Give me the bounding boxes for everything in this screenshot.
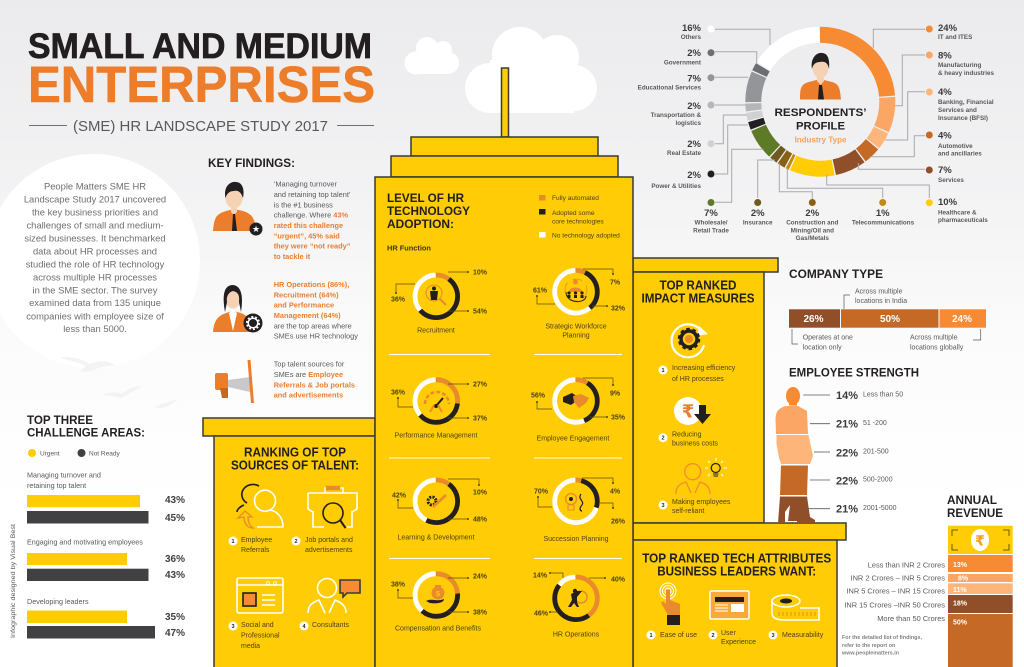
text: finding 2: are the top areas where bbox=[274, 321, 352, 330]
donut: performance management: 37% bbox=[473, 416, 488, 422]
right legend: Services bbox=[938, 177, 964, 184]
icon: social media window bbox=[237, 578, 283, 613]
clouds bbox=[404, 27, 597, 113]
panel: respondents' profile: PROFILE bbox=[796, 120, 845, 132]
stacked bar: 26% bbox=[803, 314, 824, 325]
icon: efficiency gear bbox=[672, 324, 708, 357]
panel: company type: Across multiple bbox=[855, 288, 903, 296]
revenue labels: More than 50 Crores bbox=[877, 614, 945, 623]
donut: HR operations: 40% bbox=[611, 576, 626, 584]
donut chart bbox=[753, 35, 887, 169]
intro circle: challenges of small and medium- bbox=[26, 220, 164, 231]
values bbox=[836, 390, 903, 516]
revenue labels: Less than INR 2 Crores bbox=[868, 560, 945, 569]
panel: top three challenge areas bbox=[27, 413, 185, 639]
legend: Fully automated bbox=[552, 195, 599, 202]
labels with rank numbers bbox=[658, 365, 736, 515]
revenue stack: 8% bbox=[958, 576, 969, 582]
heading: ADOPTION: bbox=[387, 217, 454, 231]
text: finding 2: and Performance bbox=[274, 301, 334, 310]
left legend: Transportation & bbox=[651, 112, 701, 119]
center person bbox=[800, 53, 841, 100]
panel: annual revenue bbox=[841, 493, 1013, 667]
donut: strategic workforce planning: 7% bbox=[610, 280, 621, 286]
left legend: 2% bbox=[687, 48, 702, 59]
panel: level of HR technology adoption: HR Function bbox=[387, 244, 431, 253]
icon: measuring tape bbox=[772, 595, 819, 620]
left legend: logistics bbox=[675, 120, 701, 127]
panel: annual revenue: ANNUAL bbox=[947, 493, 997, 507]
donut: learning and development: 10% bbox=[473, 490, 488, 496]
stacked bar bbox=[789, 309, 986, 328]
panel: level of HR technology adoption bbox=[387, 191, 626, 638]
labels with rank numbers: Ease of use bbox=[660, 632, 697, 639]
labels with rank numbers: 3 bbox=[231, 624, 235, 630]
bar chart: 43% bbox=[165, 495, 185, 506]
key findings: KEY FINDINGS: bbox=[208, 156, 295, 170]
left legend: 16% bbox=[682, 23, 702, 34]
intro circle: less than 5000. bbox=[63, 323, 127, 334]
labels with rank numbers: Increasing efficiency bbox=[672, 365, 736, 372]
labels with rank numbers: business costs bbox=[672, 441, 718, 448]
title: ENTERPRISES bbox=[28, 56, 375, 113]
icon: male professional with star badge bbox=[213, 182, 262, 236]
bottom legend: 2% bbox=[751, 208, 765, 219]
donut: learning and development: 42% bbox=[392, 492, 407, 500]
panel: ranking of top sources of talent bbox=[228, 446, 360, 650]
panel: employee strength bbox=[776, 366, 919, 523]
bar chart: 43% bbox=[165, 570, 185, 581]
labels with rank numbers: Making employees bbox=[672, 499, 731, 506]
text: finding 1: to tackle it bbox=[274, 252, 311, 261]
bottom legend: 1% bbox=[876, 208, 890, 219]
legend: core technologies bbox=[552, 218, 604, 226]
right legend: and ancillaries bbox=[938, 150, 982, 158]
labels with rank numbers: Reducing bbox=[672, 432, 702, 439]
birds bbox=[60, 357, 180, 408]
icon: consultant bbox=[308, 578, 360, 613]
labels with rank numbers: User bbox=[721, 630, 736, 637]
stacked bar: 50% bbox=[880, 314, 900, 325]
right legend: Banking, Financial bbox=[938, 99, 994, 106]
legend: Urgent bbox=[40, 450, 60, 458]
left legend: Others bbox=[681, 34, 701, 41]
labels with rank numbers: Job portals and bbox=[305, 537, 353, 544]
donut: strategic workforce planning: 61% bbox=[533, 288, 548, 294]
bar chart: 47% bbox=[165, 628, 185, 639]
title bbox=[28, 27, 375, 135]
icon: rupee cost reduction: ₹ bbox=[682, 402, 694, 422]
values: 21% bbox=[836, 419, 858, 431]
right legend bbox=[926, 23, 994, 224]
right legend: Automotive bbox=[938, 143, 973, 150]
donut: employee engagement bbox=[531, 378, 626, 442]
revenue stack bbox=[948, 526, 1013, 667]
donut: succession planning: 26% bbox=[611, 518, 626, 526]
legend bbox=[539, 195, 620, 240]
labels with rank numbers: of HR processes bbox=[672, 376, 724, 383]
revenue stack: 18% bbox=[953, 600, 968, 608]
text: finding 1: rated this challenge bbox=[274, 221, 343, 230]
revenue stack: 50% bbox=[953, 620, 968, 626]
labels with rank numbers: 1 bbox=[231, 539, 235, 545]
text: finding 2: Management (64%) bbox=[274, 311, 341, 320]
labels with rank numbers: advertisements bbox=[305, 547, 353, 554]
values: 2001-5000 bbox=[863, 505, 897, 512]
panel: respondents' profile: Industry Type bbox=[795, 136, 847, 144]
donut: learning and development: Learning & Development bbox=[397, 534, 475, 542]
donut: succession planning: 70% bbox=[534, 488, 549, 496]
note: For the detailed list of findings, bbox=[842, 635, 922, 641]
panel: ranking of top sources of talent: RANKING OF TOP bbox=[244, 446, 346, 460]
left legend bbox=[638, 23, 714, 190]
donut: employee engagement: Employee Engagement bbox=[537, 436, 609, 442]
title: SMALL AND MEDIUM bbox=[28, 27, 372, 66]
icon: job portals bbox=[308, 486, 357, 528]
human figure chart bbox=[776, 387, 815, 523]
text: finding 3: Top talent sources for bbox=[274, 360, 345, 369]
bottom legend: 7% bbox=[704, 208, 718, 219]
labels with rank numbers: 4 bbox=[302, 624, 306, 630]
labels with rank numbers: Social and bbox=[241, 622, 274, 629]
donut: HR operations bbox=[533, 572, 626, 638]
intro circle: sized businesses. It benchmarked bbox=[24, 232, 166, 243]
labels with rank numbers: Consultants bbox=[312, 622, 349, 629]
donut: performance management: Performance Management bbox=[395, 432, 477, 440]
heading: LEVEL OF HR bbox=[387, 191, 464, 205]
donut: recruitment: 10% bbox=[473, 270, 488, 276]
bottom legend: Construction and bbox=[786, 220, 839, 226]
legend bbox=[28, 449, 120, 458]
icon: male professional with star badge: ★ bbox=[252, 225, 260, 235]
revenue stack: 11% bbox=[953, 587, 967, 594]
bar chart: 45% bbox=[165, 513, 185, 524]
revenue labels: INR 2 Crores – INR 5 Crores bbox=[851, 574, 945, 583]
right legend: 24% bbox=[938, 23, 958, 34]
bar chart: 36% bbox=[165, 554, 185, 565]
values: 14% bbox=[836, 390, 858, 402]
labels with rank numbers: Measurability bbox=[782, 632, 824, 639]
text: finding 1: “urgent”, 45% said bbox=[274, 231, 340, 240]
donut: succession planning bbox=[534, 478, 626, 543]
intro circle: across multiple HR processes bbox=[33, 271, 157, 282]
center text: RESPONDENTS’ bbox=[774, 107, 866, 119]
text: finding 3: Referrals & Job portals bbox=[274, 380, 355, 389]
values: 22% bbox=[836, 448, 858, 460]
panel: top ranked impact measures bbox=[642, 278, 754, 515]
leader lines bbox=[715, 29, 929, 202]
intro circle: Landscape Study 2017 uncovered bbox=[24, 193, 166, 204]
donut: strategic workforce planning bbox=[533, 269, 626, 340]
donut: performance management: 36% bbox=[391, 390, 406, 396]
panel: top ranked impact measures: IMPACT MEASURES bbox=[642, 291, 754, 305]
panel: top three challenge areas: CHALLENGE AREAS: bbox=[27, 426, 145, 440]
right legend: & heavy industries bbox=[938, 70, 994, 77]
left legend: Power & Utilities bbox=[651, 183, 701, 190]
building shapes bbox=[203, 68, 846, 667]
panel: employee strength: EMPLOYEE STRENGTH bbox=[789, 366, 919, 380]
values: 201-500 bbox=[863, 448, 889, 456]
donut: HR operations: HR Operations bbox=[553, 632, 600, 638]
donut: learning and development bbox=[392, 479, 488, 542]
donut: employee engagement: 56% bbox=[531, 392, 546, 400]
bar chart: Engaging and motivating employees bbox=[27, 538, 143, 547]
icon: touch hand bbox=[660, 583, 680, 625]
title: (SME) HR LANDSCAPE STUDY 2017 bbox=[73, 119, 328, 135]
values: 22% bbox=[836, 476, 858, 488]
revenue labels bbox=[844, 560, 945, 623]
intro circle: data about HR processes and bbox=[33, 245, 157, 256]
panel: respondents' profile bbox=[638, 23, 994, 242]
labels with rank numbers: 3 bbox=[771, 633, 775, 639]
labels with rank numbers: media bbox=[241, 643, 260, 650]
legend: Not Ready bbox=[89, 450, 120, 458]
text: finding 2: HR Operations (86%), bbox=[274, 280, 349, 289]
bottom legend: Retail Trade bbox=[693, 228, 729, 234]
panel: top ranked impact measures: TOP RANKED bbox=[660, 278, 736, 292]
panel: ranking of top sources of talent: SOURCES OF TALENT: bbox=[231, 458, 359, 472]
panel: company type: Across multiple bbox=[910, 334, 958, 342]
text: finding 3 bbox=[274, 360, 355, 400]
left legend: Educational Services bbox=[638, 84, 701, 92]
intro circle: People Matters SME HR bbox=[44, 180, 146, 191]
text: finding 1: challenge. Where 43% bbox=[274, 211, 348, 220]
labels with rank numbers: 2 bbox=[711, 633, 715, 639]
donut: performance management bbox=[391, 380, 488, 440]
panel: company type: locations in India bbox=[855, 298, 907, 305]
intro circle: studied the role of HR technology bbox=[26, 258, 165, 269]
labels with rank numbers: self-reliant bbox=[672, 508, 704, 515]
panel: top ranked tech attributes bbox=[642, 552, 831, 646]
right legend: Insurance (BFSI) bbox=[938, 115, 988, 122]
left legend: 2% bbox=[687, 139, 702, 150]
panel: company type bbox=[789, 267, 986, 352]
text: finding 1: and retaining top talent’ bbox=[274, 190, 351, 199]
labels with rank numbers: Employee bbox=[241, 537, 272, 544]
intro circle: examined data from 135 unique bbox=[29, 297, 161, 308]
labels with rank numbers: 2 bbox=[661, 436, 665, 442]
revenue labels: INR 5 Crores – INR 15 Crores bbox=[846, 586, 945, 595]
text: finding 2: Recruitment (64%) bbox=[274, 290, 339, 299]
donut: strategic workforce planning: Planning bbox=[562, 332, 590, 340]
intro circle: the key business priorities and bbox=[32, 207, 158, 218]
values: 21% bbox=[836, 504, 858, 516]
text: finding 1 bbox=[274, 180, 351, 261]
icon: self-reliant employee bbox=[676, 458, 727, 494]
icon: rupee cost reduction bbox=[674, 397, 711, 425]
labels with rank numbers: 3 bbox=[661, 503, 665, 509]
arrows bbox=[803, 395, 830, 509]
left legend: Government bbox=[664, 60, 702, 66]
donut: strategic workforce planning: 32% bbox=[611, 306, 626, 312]
icon: employee referrals bbox=[237, 484, 283, 528]
bottom legend: 2% bbox=[805, 208, 820, 219]
left legend: 7% bbox=[687, 74, 702, 84]
heading: TECHNOLOGY bbox=[387, 204, 470, 218]
key findings bbox=[208, 156, 358, 403]
donut: strategic workforce planning: Strategic Workforce bbox=[545, 324, 607, 330]
labels with rank numbers: 1 bbox=[661, 368, 665, 374]
bottom legend: Wholesale/ bbox=[695, 220, 728, 226]
right legend: pharmaceuticals bbox=[938, 217, 988, 224]
note: www.peoplematters.in bbox=[841, 651, 899, 657]
panel: top three challenge areas: TOP THREE bbox=[27, 413, 93, 427]
right legend: 7% bbox=[938, 165, 952, 176]
revenue stack: 13% bbox=[953, 562, 968, 569]
donut: HR operations: 14% bbox=[533, 572, 548, 580]
bar chart: 35% bbox=[165, 612, 185, 623]
values: Less than 50 bbox=[863, 392, 903, 398]
heading bbox=[387, 191, 470, 231]
donut: employee engagement: 9% bbox=[610, 390, 621, 398]
stacked bar: 24% bbox=[952, 314, 972, 325]
bottom legend: Insurance bbox=[743, 220, 773, 226]
donut: compensation and benefits bbox=[391, 574, 488, 632]
note bbox=[841, 635, 922, 657]
legend: Adopted some bbox=[552, 210, 595, 217]
panel: company type: Operates at one bbox=[803, 334, 853, 342]
donut: compensation and benefits: $ bbox=[436, 589, 441, 598]
values: 500-2000 bbox=[863, 476, 893, 484]
labels with rank numbers bbox=[646, 630, 824, 646]
bar chart: retaining top talent bbox=[27, 481, 86, 490]
text: finding 1: is the #1 business bbox=[274, 200, 333, 209]
bar chart: Developing leaders bbox=[27, 597, 89, 606]
labels with rank numbers: Experience bbox=[721, 639, 756, 646]
panel: company type: location only bbox=[803, 344, 842, 352]
text: finding 1: they were “not ready” bbox=[274, 242, 351, 251]
revenue stack: ₹ bbox=[975, 534, 985, 550]
credit: Infographic designed by Visual Best bbox=[10, 524, 17, 638]
note: refer to the report on bbox=[842, 643, 895, 649]
panel: top ranked tech attributes: BUSINESS LEADERS WANT: bbox=[657, 565, 816, 579]
right legend: Healthcare & bbox=[938, 210, 977, 216]
donut: employee engagement: 35% bbox=[611, 414, 626, 422]
values: 51 -200 bbox=[863, 420, 887, 427]
panel: company type: COMPANY TYPE bbox=[789, 267, 883, 281]
donut: HR operations: 46% bbox=[534, 610, 549, 618]
icon: user experience browser bbox=[710, 591, 749, 619]
bar chart bbox=[27, 471, 185, 639]
right legend: 4% bbox=[938, 87, 952, 98]
panel: company type: locations globally bbox=[910, 344, 964, 352]
left legend: 2% bbox=[687, 170, 702, 181]
text: finding 3: SMEs are Employee bbox=[274, 370, 343, 379]
left legend: 2% bbox=[687, 101, 702, 112]
bottom legend bbox=[693, 199, 915, 242]
donut: compensation and benefits: 38% bbox=[473, 610, 488, 616]
donut: succession planning: 4% bbox=[610, 488, 621, 496]
intro circle bbox=[0, 154, 200, 368]
left legend: Real Estate bbox=[667, 150, 701, 157]
right legend: Manufacturing bbox=[938, 62, 982, 69]
labels with rank numbers: Referrals bbox=[241, 547, 270, 554]
right legend: Services and bbox=[938, 107, 977, 114]
text: finding 2 bbox=[274, 280, 358, 341]
right legend: 4% bbox=[938, 130, 952, 142]
intro circle: companies with employee size of bbox=[26, 310, 164, 321]
donut: recruitment bbox=[391, 270, 488, 334]
icon: megaphone bbox=[215, 360, 254, 403]
donut: compensation and benefits: 24% bbox=[473, 574, 488, 580]
right legend: IT and ITES bbox=[938, 34, 972, 41]
text: finding 3: and advertisements bbox=[274, 391, 343, 400]
donut: compensation and benefits: 38% bbox=[391, 582, 406, 588]
text: finding 2: SMEs use HR technology bbox=[274, 332, 358, 341]
bottom legend: Telecommunications bbox=[852, 220, 915, 226]
panel: top ranked tech attributes: TOP RANKED TECH ATTRIBUTES bbox=[642, 552, 831, 566]
intro circle: in the SME sector. The survey bbox=[33, 284, 158, 295]
legend: No technology adopted bbox=[552, 232, 620, 240]
panel: annual revenue: REVENUE bbox=[947, 506, 1003, 520]
donut: recruitment: 54% bbox=[473, 308, 488, 316]
donut: recruitment: Recruitment bbox=[417, 328, 455, 334]
donut: learning and development: 48% bbox=[473, 516, 488, 524]
labels with rank numbers: 2 bbox=[294, 539, 298, 545]
revenue labels: INR 15 Crores –INR 50 Crores bbox=[844, 601, 945, 610]
donut: recruitment: 36% bbox=[391, 296, 406, 304]
labels with rank numbers: 1 bbox=[649, 633, 653, 639]
donut: performance management: 27% bbox=[473, 382, 488, 388]
labels with rank numbers: Professional bbox=[241, 632, 280, 640]
donut: succession planning: Succession Planning bbox=[544, 536, 609, 543]
bottom legend: Gas/Metals bbox=[796, 235, 829, 242]
bar chart: Managing turnover and bbox=[27, 471, 101, 480]
right legend: 10% bbox=[938, 197, 958, 208]
donut: compensation and benefits: Compensation and Benefits bbox=[395, 626, 481, 632]
labels with rank numbers bbox=[228, 536, 353, 650]
dividers bbox=[389, 354, 622, 558]
text: finding 1: ‘Managing turnover bbox=[274, 180, 338, 189]
icon: female professional with gear badge bbox=[213, 285, 262, 332]
bottom legend: Mining/Oil and bbox=[791, 228, 834, 234]
right legend: 8% bbox=[938, 50, 952, 62]
